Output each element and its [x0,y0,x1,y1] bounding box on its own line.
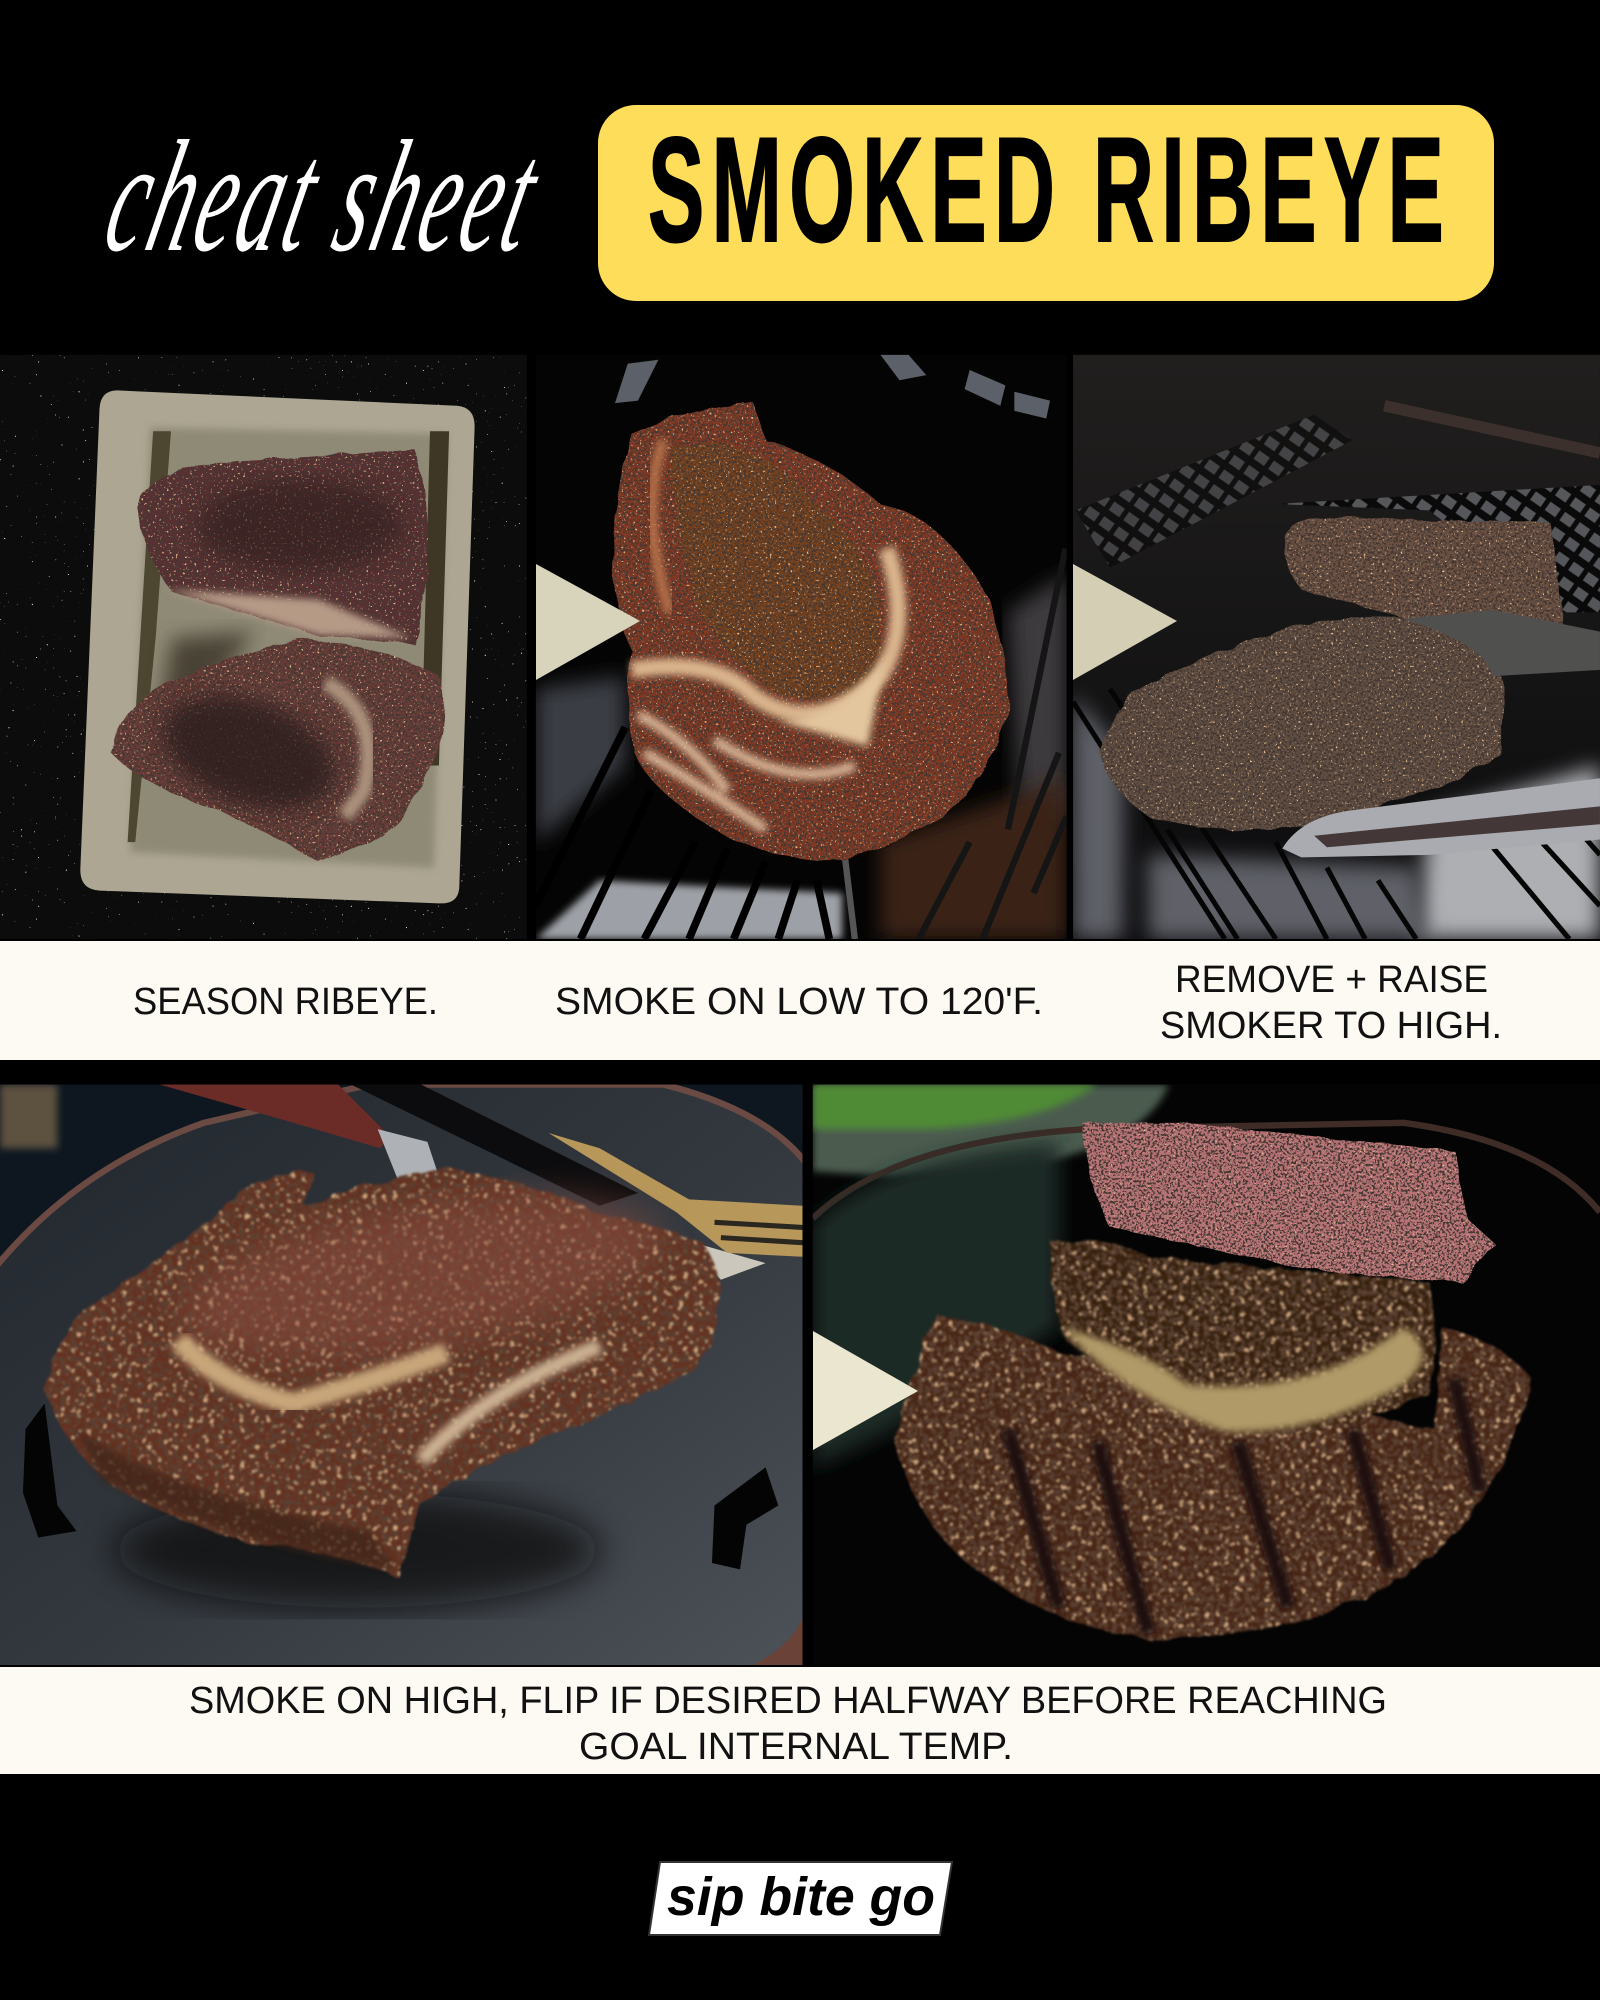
tongs [1282,610,1600,857]
logo: sip bite go: sip bite go [667,1867,935,1927]
steak [46,1165,720,1577]
photo panel: smoked ribeye on plate [0,1085,806,1671]
photo panel: ribeye smoking on low [536,355,1067,939]
raw seasoned ribeye [612,402,1008,861]
pink sliced piece [1082,1123,1495,1282]
gold fork [549,1133,803,1257]
arrow: step one to two [536,564,640,680]
tray [80,390,475,903]
caption bar: first three steps: REMOVE + RAISE [1175,959,1488,1001]
arrow: step two to three [1073,564,1177,680]
caption bar: first three steps [0,941,1600,1060]
plate [0,1085,806,1671]
caption bar: final step: GOAL INTERNAL TEMP. [579,1726,1013,1768]
grill and foil [536,355,1067,939]
arrow: step four to five [813,1331,918,1450]
photo panel: remove from smoker with tongs [1073,355,1600,939]
steak front [1100,617,1506,831]
steak back [1285,517,1563,625]
caption bar: final step [0,1667,1600,1774]
steak one [138,449,428,644]
caption bar: final step: SMOKE ON HIGH, FLIP IF DESIRED HALFWAY BEFORE REACHING [189,1680,1387,1722]
knife [159,1085,766,1280]
caption bar: first three steps: SMOKER TO HIGH. [1160,1005,1502,1047]
steak two [111,638,444,863]
burn spots [23,1403,778,1569]
steak bottom [893,1314,1531,1640]
title badge: smoked ribeye: SMOKED RIBEYE [648,106,1451,273]
caption bar: first three steps: SEASON RIBEYE. [133,981,438,1023]
caption bar: first three steps: SMOKE ON LOW TO 120'F. [555,981,1043,1023]
green bowl [813,1085,1169,1176]
photo panel: sliced ribeye on dark plate [813,1085,1600,1665]
photo panel: seasoned ribeyes on tray [0,355,527,939]
grate and foil [1073,406,1600,939]
script heading: cheat sheet: cheat sheet [91,109,557,285]
steak top with fat cap [1051,1240,1435,1433]
dark plate [813,1123,1600,1467]
